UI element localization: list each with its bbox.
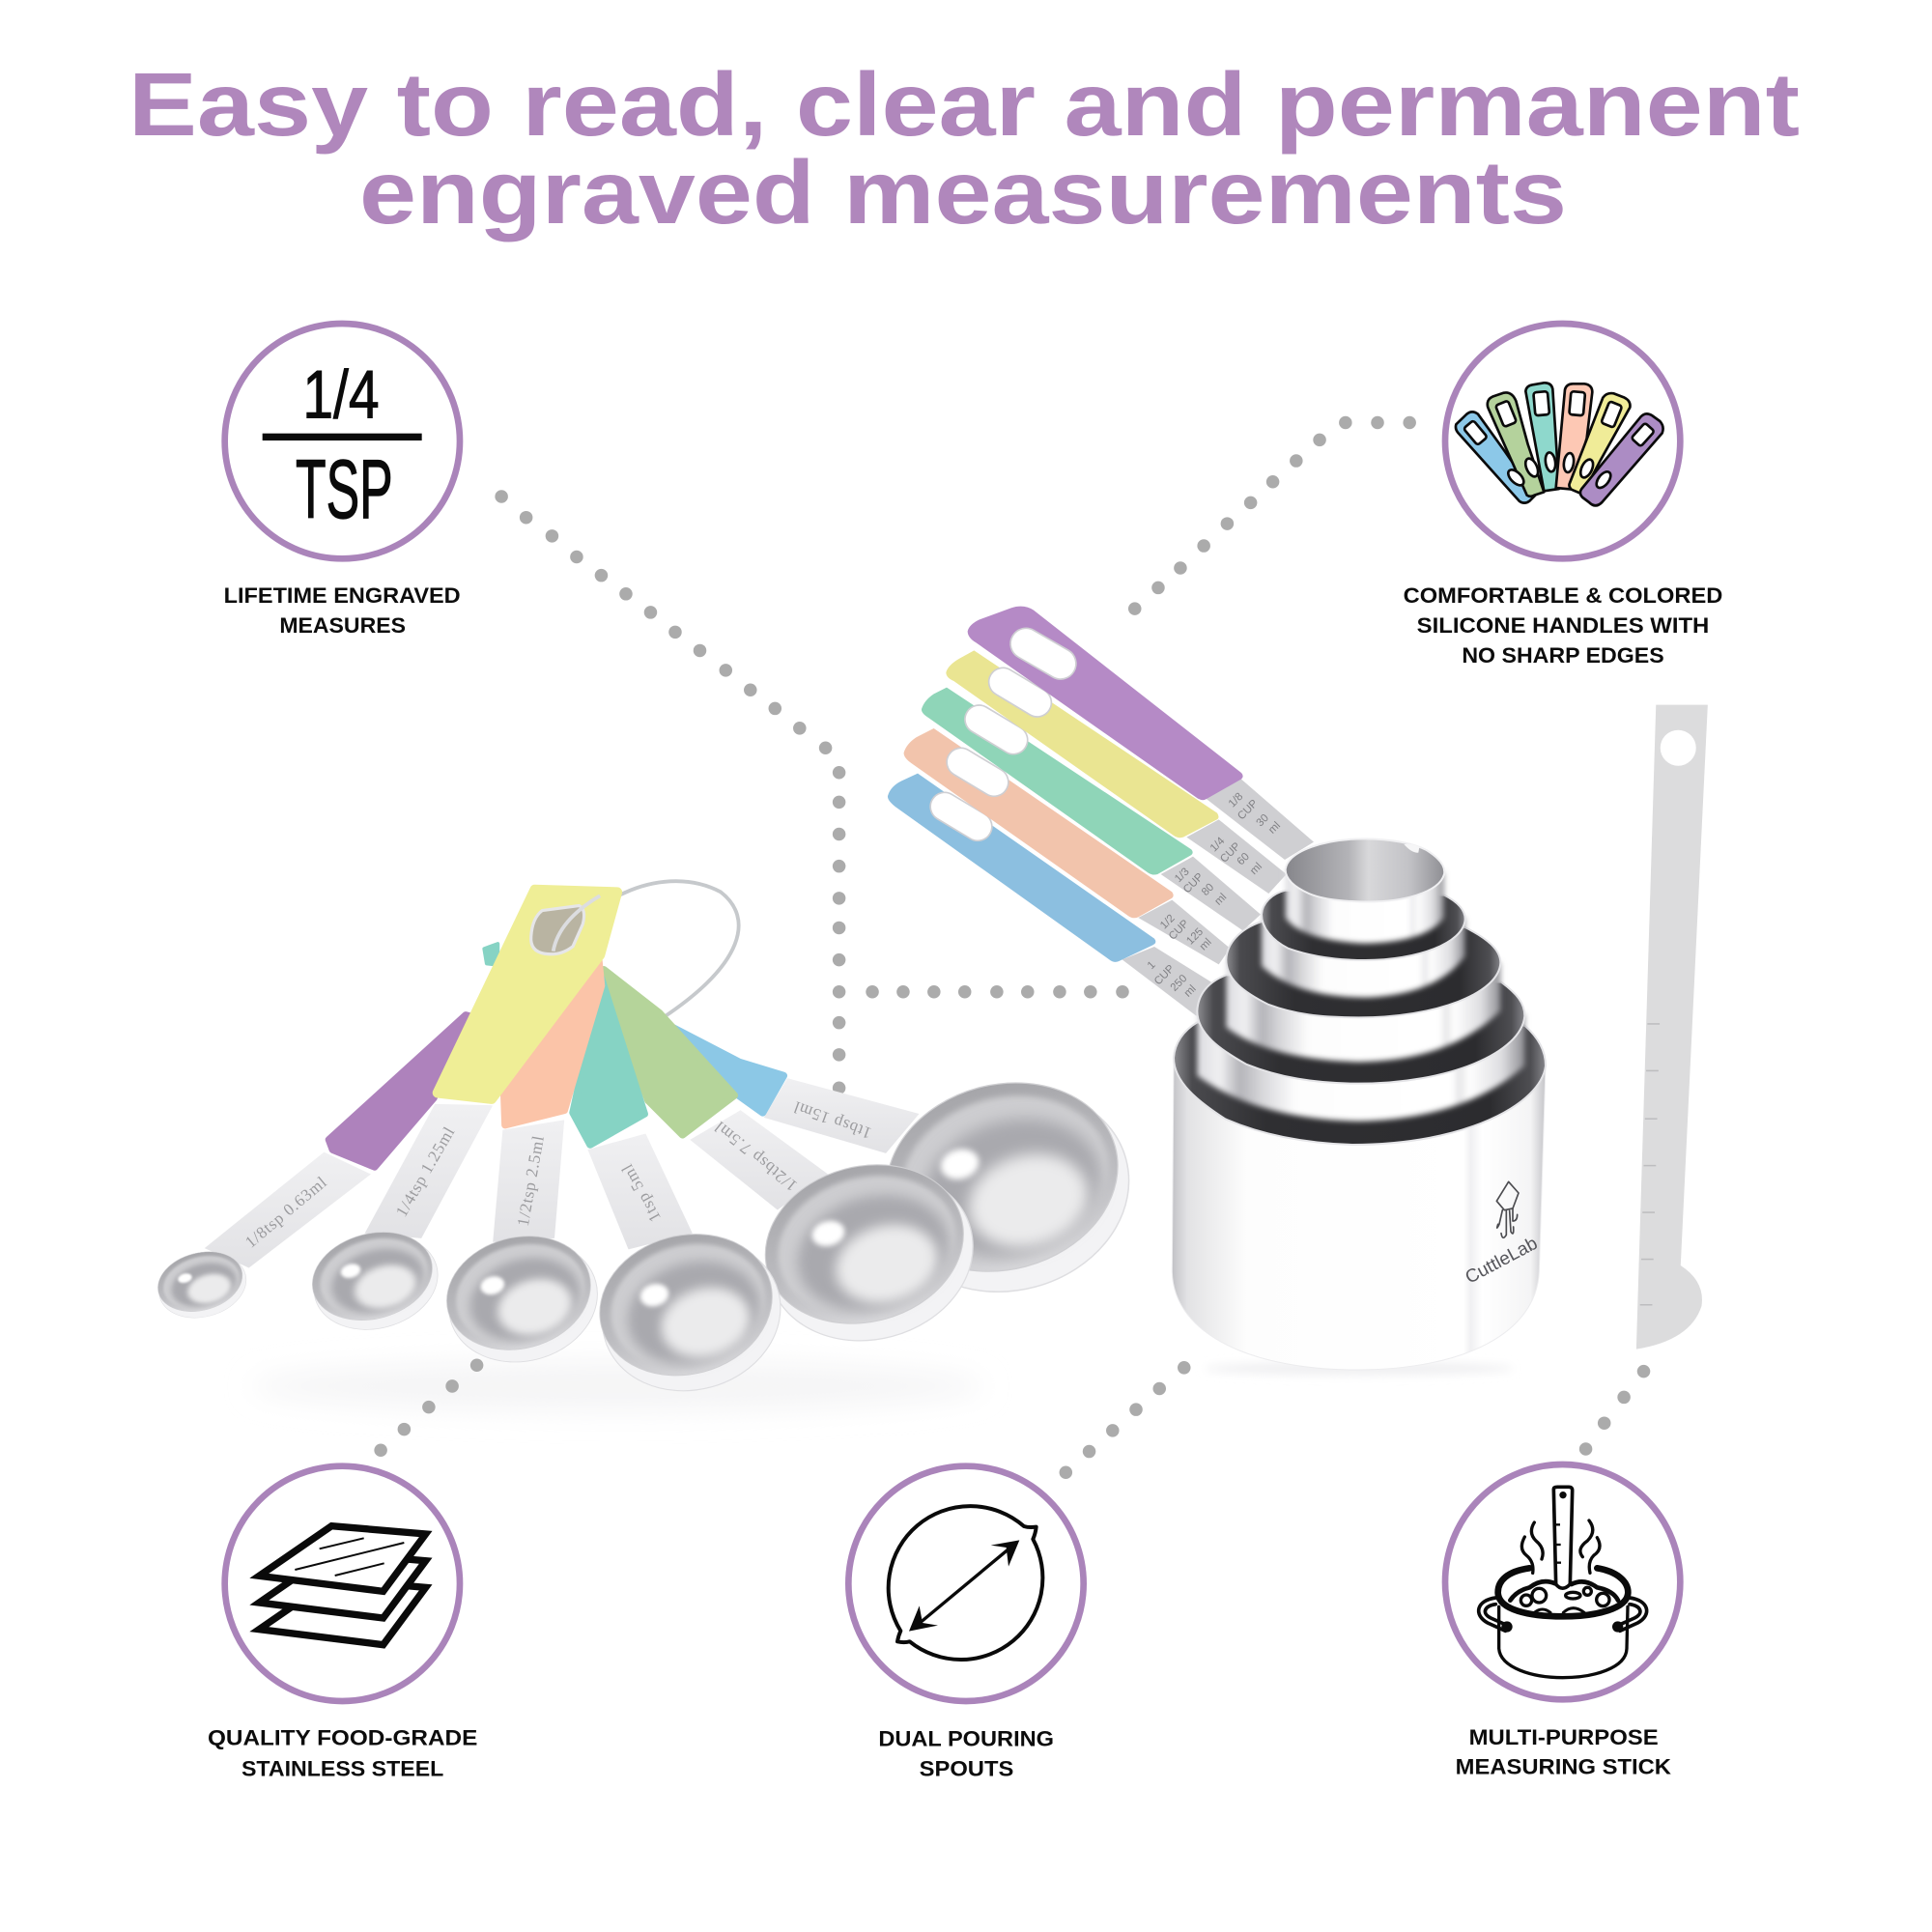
spoon engraved text: 1/4tsp 1.25ml — [392, 1123, 459, 1220]
feature: silicone handles — [1404, 324, 1722, 668]
spoon handle: yellow — [438, 890, 617, 1099]
cup neck engravings: ml — [1248, 861, 1264, 877]
measuring cup handles — [888, 607, 1314, 1016]
spoon bowl: 1/8tsp — [151, 1242, 253, 1327]
cup 3 — [1226, 922, 1500, 1062]
cup neck engravings: CUP — [1236, 798, 1261, 822]
spoon bowl: 1tbsp — [865, 1056, 1151, 1319]
cup neck engravings: ml — [1198, 936, 1214, 952]
cup neck engravings: 60 — [1236, 851, 1252, 867]
label: COMFORTABLE & COLORED — [1404, 583, 1722, 608]
label: DUAL POURING — [878, 1726, 1054, 1750]
label: MEASURING STICK — [1456, 1755, 1671, 1779]
cup handle: blue — [888, 774, 1155, 962]
cup neck engravings: 1/8 — [1227, 791, 1245, 810]
icon: 1/4 tsp: 1/4 — [302, 355, 380, 432]
icon: fan of coloured handles — [1445, 324, 1680, 558]
icon: 1/4 tsp — [225, 324, 460, 558]
cup neck engravings: 250 — [1169, 973, 1189, 994]
cup neck engravings: 125 — [1184, 926, 1206, 947]
label — [878, 1726, 1054, 1780]
feature: lifetime engraved measures — [224, 324, 461, 638]
cup handle: peach — [904, 728, 1174, 918]
cup neck engravings: CUP — [1152, 963, 1177, 987]
cup neck engravings: 1/4 — [1208, 836, 1227, 854]
spoon engraved text: 1tsp 5ml — [617, 1160, 665, 1225]
spoon bowl: 1/4tsp — [302, 1218, 448, 1343]
brand logo — [1463, 1181, 1541, 1289]
spoon bowl: 1/2tsp — [434, 1219, 611, 1378]
cup neck engravings: CUP — [1181, 871, 1206, 895]
spoon handle: teal — [484, 944, 497, 965]
title: engraved measurements — [359, 142, 1567, 242]
cup neck engravings: ml — [1212, 892, 1229, 908]
spoon engraved text: 1/8tsp 0.63ml — [242, 1173, 330, 1252]
spoon handle: green — [604, 970, 734, 1135]
measuring spoons on ring — [151, 881, 1151, 1410]
title — [128, 54, 1800, 242]
cup neck engravings — [1146, 791, 1283, 1000]
largest cup — [1172, 1022, 1546, 1370]
icon: 1/4 tsp: TSP — [296, 443, 393, 536]
label: LIFETIME ENGRAVED — [224, 583, 461, 608]
label — [208, 1726, 477, 1780]
cup neck engravings: 80 — [1200, 882, 1216, 898]
icon: stick in cooking pot — [1445, 1464, 1680, 1699]
label: NO SHARP EDGES — [1462, 643, 1664, 668]
cup neck engravings: ml — [1266, 820, 1283, 837]
label: MEASURES — [279, 613, 406, 638]
spoon necks — [205, 1078, 920, 1267]
spoon engraved text: 1tbsp 15ml — [791, 1097, 874, 1143]
label: SPOUTS — [920, 1756, 1013, 1780]
measuring stick — [1636, 705, 1708, 1350]
ring over hole — [554, 895, 600, 952]
smallest cup — [1286, 838, 1444, 944]
cup neck engravings: ml — [1182, 983, 1199, 1000]
cup shadow — [1205, 1362, 1514, 1375]
spoon bowl: 1/2tbsp — [748, 1142, 992, 1363]
icon: cup with two spouts and arrow — [848, 1466, 1084, 1701]
cup handle: teal — [922, 688, 1193, 875]
spoon bowl: 1tsp — [583, 1214, 798, 1410]
label: MULTI-PURPOSE — [1469, 1725, 1659, 1749]
spoon engraved text: 1/2tsp 2.5ml — [514, 1134, 548, 1228]
yellow handle hole — [531, 905, 584, 954]
nested measuring cups — [1172, 838, 1546, 1375]
brand name: CuttleLab — [1463, 1234, 1541, 1289]
icon: stacked sheets — [225, 1466, 460, 1701]
cup neck engravings: 1/3 — [1173, 866, 1192, 885]
label: STAINLESS STEEL — [242, 1756, 443, 1780]
cup neck engravings: CUP — [1167, 918, 1191, 943]
cup neck engravings: 1 — [1146, 959, 1158, 972]
spoon engraved text — [242, 1097, 874, 1252]
cup handle: purple — [968, 607, 1243, 800]
cup handle: yellow — [946, 650, 1219, 838]
spoon handle: blue — [672, 1028, 783, 1113]
spoon ring — [560, 881, 739, 1018]
label: QUALITY FOOD-GRADE — [208, 1726, 477, 1750]
feature: multi-purpose measuring stick — [1445, 1464, 1680, 1779]
cup necks — [1122, 780, 1314, 1016]
label — [224, 583, 461, 638]
label — [1404, 583, 1722, 668]
icon: squid — [1496, 1181, 1519, 1237]
cup neck engravings: 30 — [1255, 812, 1271, 829]
feature: dual pouring spouts — [848, 1466, 1084, 1780]
cup neck engravings: CUP — [1218, 840, 1243, 866]
spoon engraved text: 1/2tbsp 7.5ml — [711, 1118, 801, 1195]
cup 2 — [1262, 891, 1465, 998]
dotted connector lines — [374, 416, 1650, 1479]
label: SILICONE HANDLES WITH — [1417, 613, 1709, 638]
label — [1456, 1725, 1671, 1779]
spoon handle: peach — [504, 961, 601, 1125]
spoon shadow — [251, 1361, 985, 1411]
title: Easy to read, clear and permanent — [128, 54, 1800, 155]
cup 4 — [1197, 975, 1524, 1122]
feature: quality stainless steel — [208, 1466, 477, 1780]
cup neck engravings: 1/2 — [1158, 913, 1178, 931]
spoon handle: purple — [329, 1015, 470, 1167]
